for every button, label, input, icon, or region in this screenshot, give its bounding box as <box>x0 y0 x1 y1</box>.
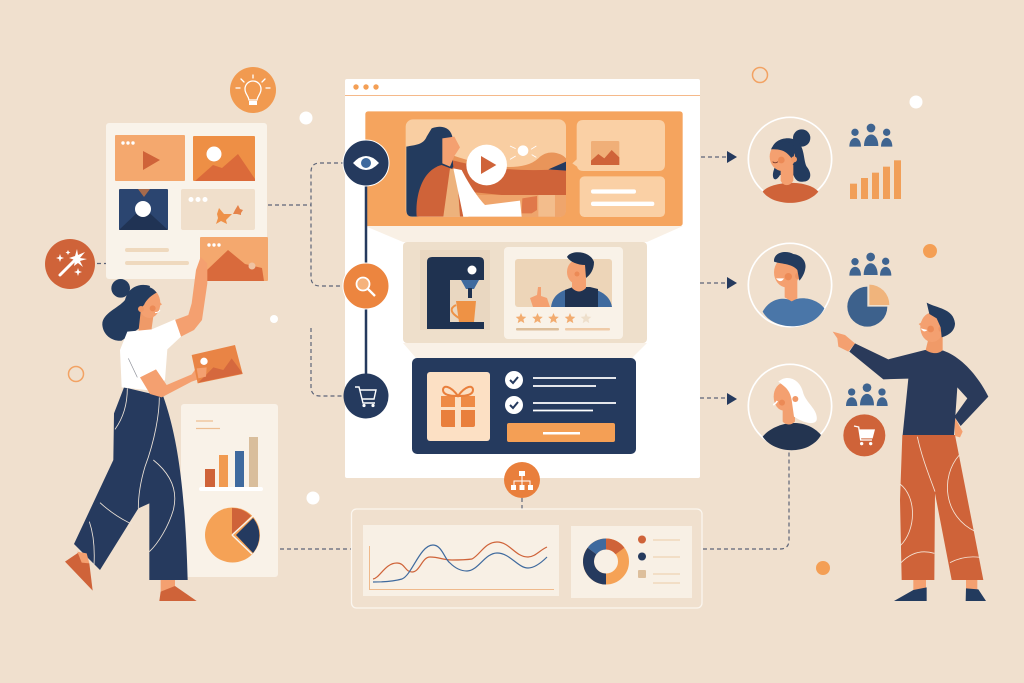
video thumbnail <box>115 135 185 181</box>
panel: conversion offer <box>412 358 636 454</box>
icon: light bulb <box>230 67 276 113</box>
decorative dots <box>68 68 937 575</box>
raised arm <box>175 257 207 337</box>
sweater <box>849 343 988 435</box>
review card <box>504 247 623 339</box>
avatar: smiling man <box>748 243 832 327</box>
audience icon <box>846 383 888 406</box>
dark media thumbnail <box>119 189 168 230</box>
audience icon <box>849 253 891 276</box>
head <box>919 313 944 342</box>
neck <box>926 335 943 353</box>
hair back <box>102 279 150 341</box>
shirt <box>120 319 181 391</box>
panel: awareness hero <box>365 111 683 226</box>
icon: cart <box>344 374 388 418</box>
play button <box>466 145 507 185</box>
audience icon <box>849 124 892 147</box>
ankles <box>913 580 977 591</box>
checklist <box>505 371 616 414</box>
pants <box>900 435 983 580</box>
ear <box>138 306 144 312</box>
shoes <box>894 587 986 601</box>
avatar: woman with bun <box>748 117 832 203</box>
journey line <box>365 186 367 375</box>
icon: eye <box>343 140 389 186</box>
right column in zoomed coordinates <box>748 117 901 327</box>
pie icon <box>847 285 889 327</box>
hip hand <box>954 417 963 437</box>
call to action button <box>507 423 615 442</box>
donut chart <box>571 526 692 598</box>
lower right column in zoomed coordinates <box>748 303 988 601</box>
avatar: silver haired woman <box>748 364 832 450</box>
trousers <box>74 387 188 580</box>
tablet <box>192 345 243 383</box>
pie <box>205 508 260 562</box>
video presenter <box>406 127 555 217</box>
reviewer <box>530 252 612 307</box>
line chart <box>363 525 559 596</box>
rating stars <box>516 313 591 323</box>
bars <box>199 437 263 491</box>
connectors <box>97 157 789 549</box>
video scene <box>406 119 566 217</box>
panel: content library <box>106 123 267 279</box>
held image card <box>200 237 268 281</box>
man figure <box>833 303 988 601</box>
panel: analytics <box>352 509 702 608</box>
panel: consideration product review <box>403 242 647 343</box>
forearm <box>140 367 207 397</box>
icon: magic wand <box>45 239 95 289</box>
woman figure <box>65 257 243 601</box>
icon: cart badge <box>843 414 885 456</box>
orange bars <box>850 160 901 199</box>
panel: bar and pie chart <box>181 404 278 577</box>
arrowheads <box>727 151 737 405</box>
hair front <box>129 286 157 312</box>
shoes <box>65 552 197 601</box>
hair <box>927 303 955 337</box>
head and neck <box>138 289 162 335</box>
sticker card <box>181 189 255 230</box>
icon: hierarchy <box>504 462 540 498</box>
pointing hand <box>833 332 855 352</box>
side text card <box>580 176 665 217</box>
gift <box>427 372 490 441</box>
side image card <box>572 120 665 171</box>
coffee machine <box>420 250 490 330</box>
image thumbnail <box>193 136 255 181</box>
shirt crease <box>128 358 137 377</box>
icon: magnifier <box>343 263 389 309</box>
panel: browser window <box>345 79 700 478</box>
